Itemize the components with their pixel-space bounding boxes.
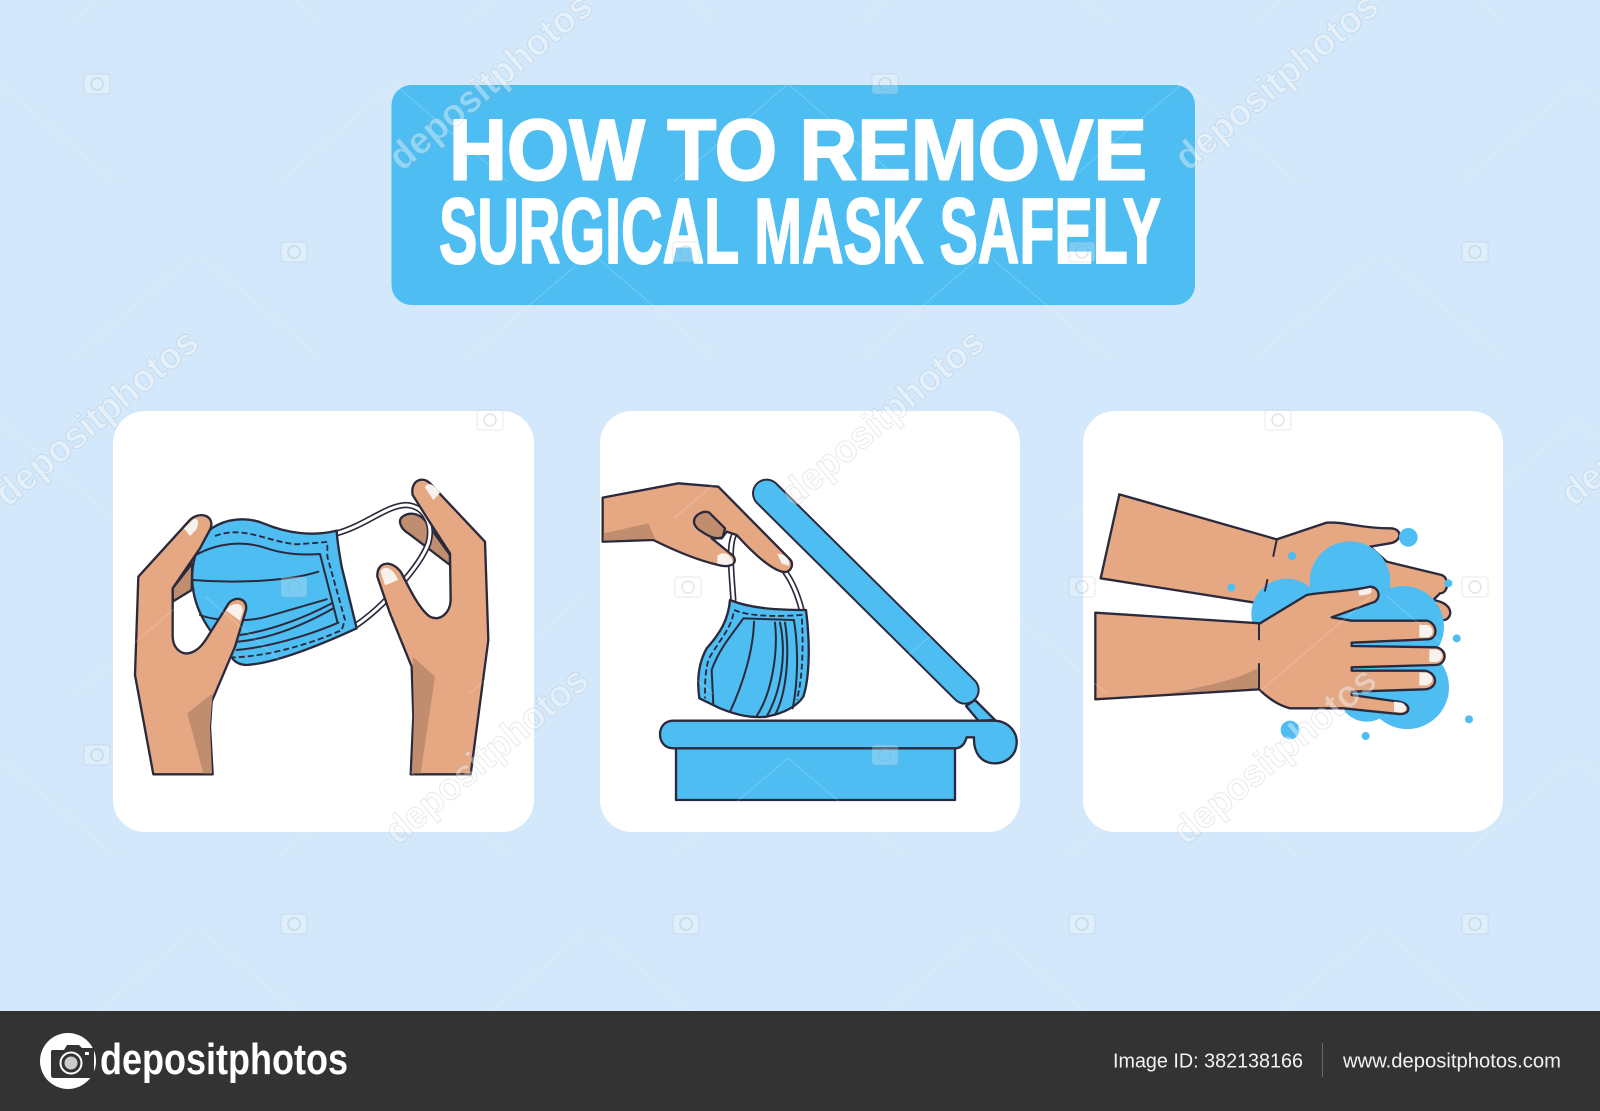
icon: hanging mask [698,600,809,717]
icon: bin hinge rod [966,700,995,721]
website url: www.depositphotos.com [1342,1050,1561,1072]
icon: left hand back finger [173,563,192,602]
icon: camera logo [40,1033,96,1089]
icon: bin lid [767,493,965,690]
icon: right hand [377,480,488,774]
icon: back wrist crease [1265,540,1277,591]
icon: soap foam [1251,541,1449,729]
stock watermarks: depositphotos [1165,659,1385,853]
icon: hand holding loops [603,483,792,572]
image id: Image ID: 382138166 [1113,1050,1303,1072]
panel: step 3 wash hands [1083,411,1503,832]
panel: step 1 stretch mask off with both hands [113,411,534,832]
icon: bin body [676,748,955,800]
icon: surgical mask [192,519,357,665]
title line 1: HOW TO REMOVE [449,102,1147,198]
icon: front hand and arm [1095,587,1445,714]
icon: mask ear loop [337,505,430,625]
icon: right hand back finger [400,514,450,565]
panel: step 2 drop mask in closed bin [600,411,1020,832]
footer bar [0,1011,1600,1111]
icon: back hand and arm [1101,494,1450,620]
stock watermarks [0,0,1600,853]
icon: bin top plate and hinge [660,721,1017,763]
logo wordmark: depositphotos [100,1035,348,1084]
title line 2: SURGICAL MASK SAFELY [439,179,1161,283]
icon: left hand [135,515,246,774]
icon: ear loops [731,535,802,610]
stock watermarks: depositphotos [377,659,597,853]
icon: soap bubbles [1227,528,1473,740]
stock watermarks: depositphotos [773,321,993,515]
title banner [392,85,1195,305]
